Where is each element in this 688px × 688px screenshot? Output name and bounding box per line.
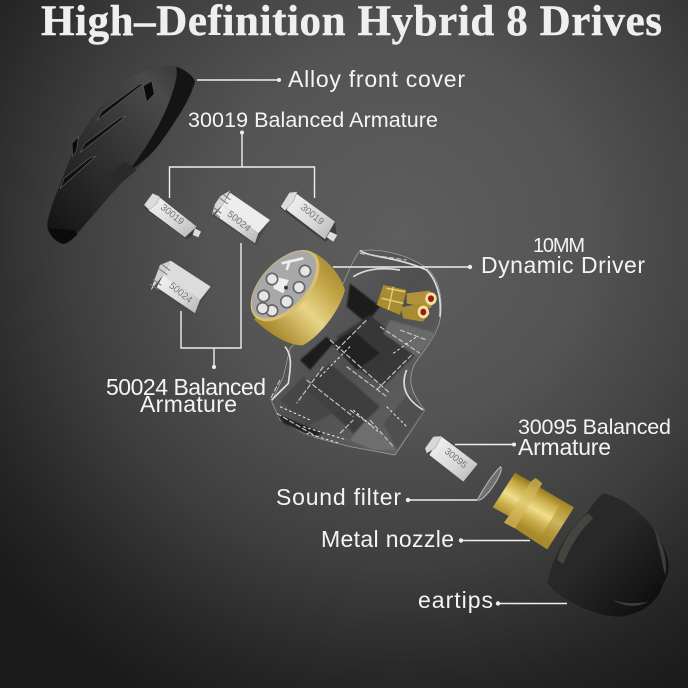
label: 30019 balanced armature xyxy=(170,108,438,198)
icon: 50024 driver center: 50024 xyxy=(225,209,253,235)
label: dynamic driver: Dynamic Driver xyxy=(481,252,645,278)
label: metal nozzle: Metal nozzle xyxy=(321,526,454,552)
label: 30095 balanced armature: 30095 Balanced xyxy=(518,415,671,439)
icon: alloy front cover xyxy=(47,66,195,244)
label: dynamic driver xyxy=(333,235,645,278)
label: 30095 balanced armature xyxy=(455,415,671,460)
icon: 50024 driver lower xyxy=(149,260,211,315)
label: 50024 balanced armature: Armature xyxy=(140,391,237,417)
icon: transparent shell xyxy=(270,250,441,455)
icon: 50024 driver center xyxy=(211,191,270,245)
icon: metal nozzle xyxy=(493,473,574,549)
label: 50024 balanced armature xyxy=(106,243,266,417)
label: sound filter xyxy=(276,484,477,510)
label: eartips xyxy=(418,587,567,613)
label: sound filter: Sound filter xyxy=(276,484,401,510)
icon: 30095 driver: 30095 xyxy=(443,446,469,470)
icon: 30019 driver right: 30019 xyxy=(298,202,326,228)
label: 30019 balanced armature: 30019 Balanced Armature xyxy=(188,108,438,132)
label: eartips: eartips xyxy=(418,587,493,613)
label: 50024 balanced armature: 50024 Balanced xyxy=(106,374,266,400)
icon: 30019 driver left xyxy=(143,193,201,239)
icon: sound filter xyxy=(477,467,501,500)
label: 30095 balanced armature: Armature xyxy=(518,434,611,460)
label: alloy front cover: Alloy front cover xyxy=(288,66,465,92)
icon: 30019 driver left: 30019 xyxy=(158,202,186,228)
icon: 50024 driver lower: 50024 xyxy=(166,280,195,306)
icon: 30095 driver xyxy=(424,435,478,482)
label: alloy front cover xyxy=(197,66,465,92)
label: metal nozzle xyxy=(321,526,530,552)
label: dynamic driver: 10MM xyxy=(533,235,585,257)
icon: dynamic driver xyxy=(238,238,345,345)
icon: 30019 driver right xyxy=(279,192,337,242)
icon: eartips xyxy=(547,493,669,617)
